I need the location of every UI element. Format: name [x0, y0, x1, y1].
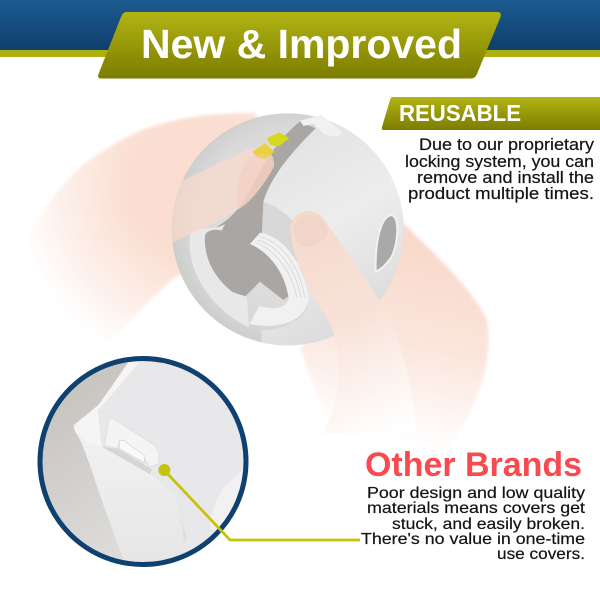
collar thread lines	[255, 237, 305, 297]
thumb nail	[294, 215, 328, 247]
reusable banner: REUSABLE	[399, 100, 521, 126]
shaded band beneath shell rim	[262, 202, 298, 262]
clip opening	[119, 441, 145, 463]
right lobe	[210, 471, 243, 531]
reusable description	[405, 136, 595, 203]
header band	[0, 0, 600, 57]
other brands description: Poor design and low quality	[367, 485, 585, 502]
reusable description: Due to our proprietary	[419, 136, 595, 154]
top rim band	[74, 358, 142, 447]
other brands description	[361, 485, 586, 563]
detail circle: other brand clip	[37, 356, 250, 568]
highlighted tab green	[267, 132, 289, 147]
title banner: New & Improved	[141, 21, 462, 67]
reusable description: remove and install the	[417, 169, 594, 187]
product photo: hands holding outlet cover	[38, 112, 490, 432]
callout connector	[158, 464, 360, 540]
other brands description: stuck, and easily broken.	[392, 516, 585, 533]
other brands description: There's no value in one-time	[361, 531, 585, 548]
index finger overlay	[172, 148, 274, 243]
circle ring	[40, 358, 246, 564]
locking clips	[300, 115, 342, 137]
reusable description: locking system, you can	[405, 153, 594, 171]
ball base	[172, 113, 404, 345]
ball detail clipped to sphere	[172, 122, 404, 345]
oval hole	[376, 215, 397, 272]
fingernail	[237, 154, 274, 208]
threaded collar	[249, 233, 309, 326]
thumb	[290, 211, 417, 433]
dark inner channel and cavity	[205, 122, 316, 300]
other brands heading: Other Brands	[365, 446, 582, 484]
other brands description: use covers.	[497, 546, 585, 563]
cavity inner lip	[190, 224, 249, 327]
lower cover body	[73, 425, 184, 567]
title banner	[98, 12, 501, 78]
left hand	[0, 113, 300, 390]
reusable description: product multiple times.	[408, 185, 594, 203]
clip loop	[105, 418, 159, 467]
main cover surface	[98, 361, 244, 553]
other brands description: materials means covers get	[367, 500, 586, 517]
highlighted tab yellow	[252, 143, 274, 159]
reusable banner	[382, 97, 600, 130]
right shell	[262, 122, 404, 345]
rim shadow strip	[102, 447, 152, 474]
right hand behind ball	[300, 220, 489, 460]
